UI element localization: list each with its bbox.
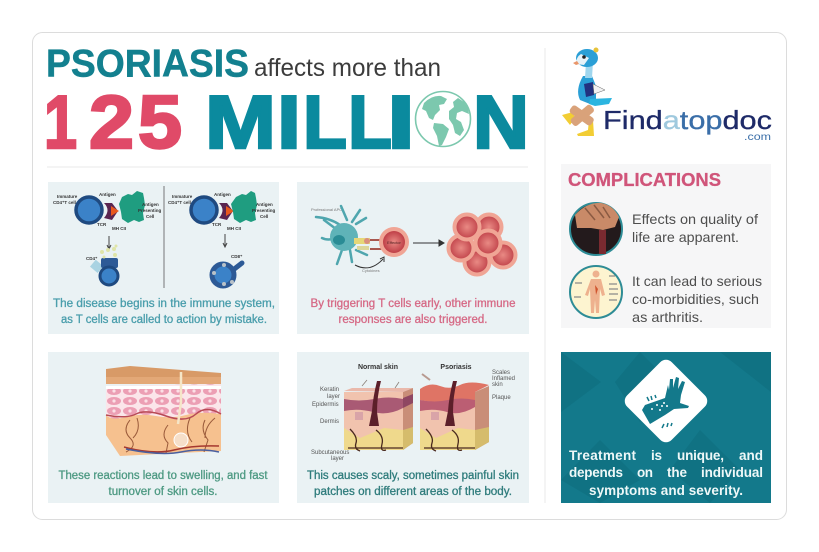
icon: mascot bird — [562, 48, 612, 136]
labels: skin layers: Scales — [492, 370, 510, 376]
headline number: 125: 2 — [89, 80, 134, 164]
diagram: T cell activation left: Immature — [57, 194, 78, 199]
diagram: T cell activation left — [53, 191, 162, 285]
text: treatment message: and — [739, 448, 763, 463]
title — [44, 42, 529, 164]
labels: skin layers: Epidermis — [312, 402, 339, 408]
illustration: psoriasis skin block — [420, 364, 489, 451]
diagram: T cell activation right: Antigen — [256, 202, 273, 207]
icon: hands on cane — [570, 203, 622, 255]
labels: skin layers: Inflamed — [492, 376, 515, 382]
headline word: million: I — [277, 80, 301, 164]
logo: Findatopdoc — [562, 48, 772, 143]
text: quality of life: life are apparent. — [632, 229, 739, 245]
panel: immune system — [48, 182, 279, 334]
headline number: 125: 5 — [138, 80, 182, 164]
wordmark suffix: .com — [744, 132, 771, 143]
diagram: T cell activation right: Immature — [172, 194, 193, 199]
headline number: 125 — [44, 80, 182, 164]
diagram: T cell activation right: Antigen — [214, 192, 231, 197]
caption: turnover of skin cells. — [108, 486, 218, 498]
labels: skin layers: layer — [327, 394, 340, 400]
caption: The disease begins in the immune system, — [53, 298, 275, 310]
panel: normal skin versus psoriasis — [297, 352, 529, 503]
panel: skin reaction — [48, 352, 279, 503]
text: treatment message — [569, 448, 763, 498]
diagram: antigen presenting cell: Effector — [387, 240, 402, 245]
caption — [307, 470, 519, 498]
labels: skin layers: Dermis — [320, 419, 339, 425]
headline word: million: L — [303, 80, 347, 164]
caption — [53, 298, 275, 326]
text: treatment message: the — [667, 465, 687, 480]
text: quality of life — [632, 211, 758, 245]
headline word: million: M — [205, 80, 276, 164]
diagram: T cell activation left: CD4⁺ — [86, 256, 98, 261]
text: treatment message: individual — [701, 465, 763, 480]
caption — [310, 298, 516, 326]
diagram: T cell activation left: Antigen — [99, 192, 116, 197]
diagram: T cell activation left: CD4⁺T cell — [53, 200, 76, 205]
heading: psoriasis: PSORIASIS — [46, 42, 249, 86]
diagram: T cell activation left: Cell — [146, 214, 154, 219]
icon: globe as letter O — [416, 92, 470, 146]
text: treatment message: unique, — [677, 448, 724, 463]
labels: skin layers: skin — [492, 382, 503, 388]
heading: complications: COMPLICATIONS — [568, 169, 721, 190]
caption: These reactions lead to swelling, and fast — [58, 470, 268, 482]
caption: responses are also triggered. — [338, 314, 488, 326]
heading: affects more than: affects more than — [254, 54, 441, 82]
headline word: million — [205, 80, 529, 164]
diagram: antigen presenting cell: Professional APC — [311, 207, 342, 212]
text: co-morbidities: co-morbidities, such — [632, 291, 759, 307]
caption — [58, 470, 268, 498]
illustration: normal skin block: Normal skin — [358, 364, 398, 371]
diagram: T cell activation right: Presenting — [252, 208, 276, 213]
text: treatment message: on — [637, 465, 653, 480]
diagram: T cell activation right: CD4⁺T cell — [168, 200, 191, 205]
diagram: T cell activation left: Antigen — [142, 202, 159, 207]
headline word: million: L — [348, 80, 392, 164]
diagram: T cell activation left: MH CII — [112, 226, 126, 231]
caption: By triggering T cells early, other immune — [310, 298, 516, 310]
text: treatment message: symptoms and severity. — [589, 483, 743, 498]
icon: body chart — [570, 266, 622, 318]
diagram: T cell activation right: MH CII — [227, 226, 241, 231]
illustration: skin cross-section — [106, 366, 221, 456]
diagram: antigen presenting cell: Cytokines — [362, 268, 380, 273]
icon: diamond with affected arm — [621, 356, 711, 446]
diagram: T cell activation right — [168, 191, 276, 286]
panel: complications — [561, 164, 771, 328]
text: quality of life: Effects on quality of — [632, 211, 758, 227]
caption: patches on different areas of the body. — [314, 486, 512, 498]
diagram: T cell activation right: TCR — [212, 222, 222, 227]
wordmark: Find atop doc — [603, 105, 772, 135]
arrow — [413, 240, 444, 246]
headline word: million: I — [387, 80, 415, 164]
illustration: psoriasis skin block: Psoriasis — [440, 364, 472, 371]
text: treatment message: depends — [569, 465, 623, 480]
panel: T cell trigger — [297, 182, 529, 334]
text: treatment message: is — [651, 448, 662, 463]
text: treatment message: Treatment — [569, 448, 636, 463]
illustration: normal skin block — [344, 364, 413, 451]
text: co-morbidities: It can lead to serious — [632, 273, 762, 289]
labels: skin layers — [311, 370, 515, 462]
diagram: antigen presenting cell — [311, 206, 409, 273]
panel: treatment — [561, 352, 771, 503]
caption: This causes scaly, sometimes painful skin — [307, 470, 519, 482]
diagram: T cell activation left: TCR — [97, 222, 107, 227]
headline word: million: N — [473, 80, 529, 164]
diagram: T cell activation left: Presenting — [138, 208, 162, 213]
labels: skin layers: layer — [331, 456, 344, 462]
caption: as T cells are called to action by mistake. — [61, 314, 267, 326]
labels: skin layers: Subcutaneous — [311, 450, 349, 456]
diagram: T cell activation right: CD8⁺ — [231, 254, 243, 259]
text: co-morbidities — [632, 273, 762, 325]
text: co-morbidities: as arthritis. — [632, 309, 703, 325]
labels: skin layers: Plaque — [492, 395, 511, 401]
diagram: T cell activation right: Cell — [260, 214, 268, 219]
labels: skin layers: Keratin — [320, 387, 339, 393]
diagram: proliferating T cells — [448, 214, 516, 274]
headline number: 125: 1 — [44, 80, 77, 164]
